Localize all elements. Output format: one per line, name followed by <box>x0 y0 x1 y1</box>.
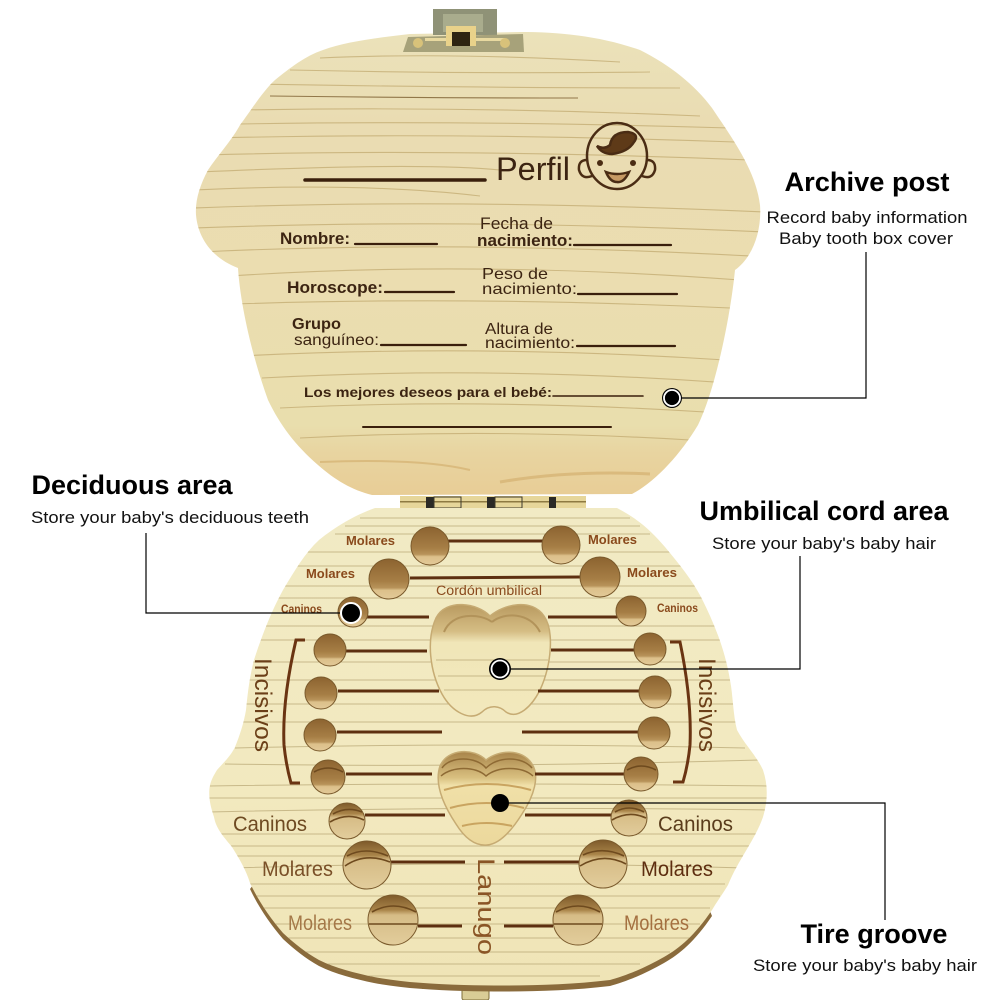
callout: deciduous area: Store your baby's deciduous teeth <box>31 508 309 527</box>
form: birth height field: nacimiento: <box>485 335 575 352</box>
callout: archive post: Record baby information <box>766 208 968 227</box>
form: birth date field: nacimiento: <box>477 232 573 250</box>
tray engraved labels: incisors with brackets: Incisivos <box>693 658 720 752</box>
form: birth height field <box>485 321 675 352</box>
callout: tire groove: Tire groove <box>800 919 948 949</box>
tray engraved labels: lower canines and molars: Lanugo <box>472 858 499 955</box>
form: profile heading: Perfil <box>496 151 570 187</box>
callout: archive post: Baby tooth box cover <box>779 229 953 248</box>
open lid <box>195 32 765 495</box>
form: birth date field: Fecha de <box>480 215 553 233</box>
upper tooth cavity <box>430 605 550 716</box>
tray engraved labels: upper molars and canines: Molares <box>306 566 355 581</box>
form: birth date field <box>477 215 671 250</box>
callout: umbilical cord area: Store your baby's baby hair <box>712 534 936 553</box>
tray engraved labels: upper molars and canines: Molares <box>346 533 395 548</box>
tray wood body <box>209 508 767 985</box>
tray engraved labels: upper molars and canines: Molares <box>588 532 637 547</box>
tooth holes: left and right rows <box>304 526 671 945</box>
hinge <box>400 496 586 509</box>
hole grain rings <box>314 766 656 924</box>
callout: archive post <box>662 167 968 408</box>
tray engraved labels: upper molars and canines <box>281 532 698 616</box>
form: blood group field: sanguíneo: <box>294 332 379 349</box>
callout: umbilical cord area <box>489 496 949 680</box>
tray engraved labels: upper molars and canines: Caninos <box>657 601 698 615</box>
burned guide lines <box>337 541 639 926</box>
form: blood group field: Grupo <box>292 316 341 333</box>
callout: tire groove: Store your baby's baby hair <box>753 956 977 975</box>
tray rim shadow <box>250 876 712 991</box>
tray engraved labels: lower canines and molars: Molares <box>624 912 689 935</box>
tray engraved labels: upper molars and canines: Caninos <box>281 602 322 616</box>
form: birth weight field: Peso de <box>482 266 548 283</box>
top clasp <box>403 9 524 52</box>
tray engraved labels: lower canines and molars <box>233 813 733 955</box>
tray engraved labels: upper molars and canines: Molares <box>627 565 677 580</box>
tray engraved labels: lower canines and molars: Molares <box>288 912 352 935</box>
form: name field: Nombre: <box>280 230 350 248</box>
callout: tire groove <box>491 794 977 975</box>
tray engraved labels: upper molars and canines: Cordón umbilical <box>436 582 542 598</box>
tray engraved labels: lower canines and molars: Molares <box>641 858 713 881</box>
tray wood grain <box>208 518 770 976</box>
callout: deciduous area <box>31 470 361 623</box>
tray engraved labels: lower canines and molars: Molares <box>262 858 333 881</box>
lid wood grain <box>195 56 765 482</box>
form: horoscope field: Horoscope: <box>287 279 383 297</box>
callout: deciduous area: Deciduous area <box>32 470 233 500</box>
lid wood body <box>196 32 760 495</box>
tray engraved labels: lower canines and molars: Caninos <box>233 813 307 836</box>
form: blood group field <box>292 316 466 349</box>
tray engraved labels: lower canines and molars: Caninos <box>658 813 733 836</box>
form: birth weight field <box>482 266 677 298</box>
form: best wishes: Los mejores deseos para el bebé: <box>304 384 552 400</box>
lower tooth cavity <box>438 752 536 845</box>
bottom clasp <box>420 973 530 1000</box>
tray <box>208 508 770 991</box>
tray engraved labels: incisors with brackets: Incisivos <box>249 658 276 752</box>
icon: baby face <box>579 123 655 189</box>
form: birth height field: Altura de <box>485 321 553 338</box>
callout: archive post: Archive post <box>784 167 950 197</box>
form: birth weight field: nacimiento: <box>482 281 577 298</box>
tray engraved labels: incisors with brackets <box>249 640 720 783</box>
callout: umbilical cord area: Umbilical cord area <box>700 496 949 526</box>
